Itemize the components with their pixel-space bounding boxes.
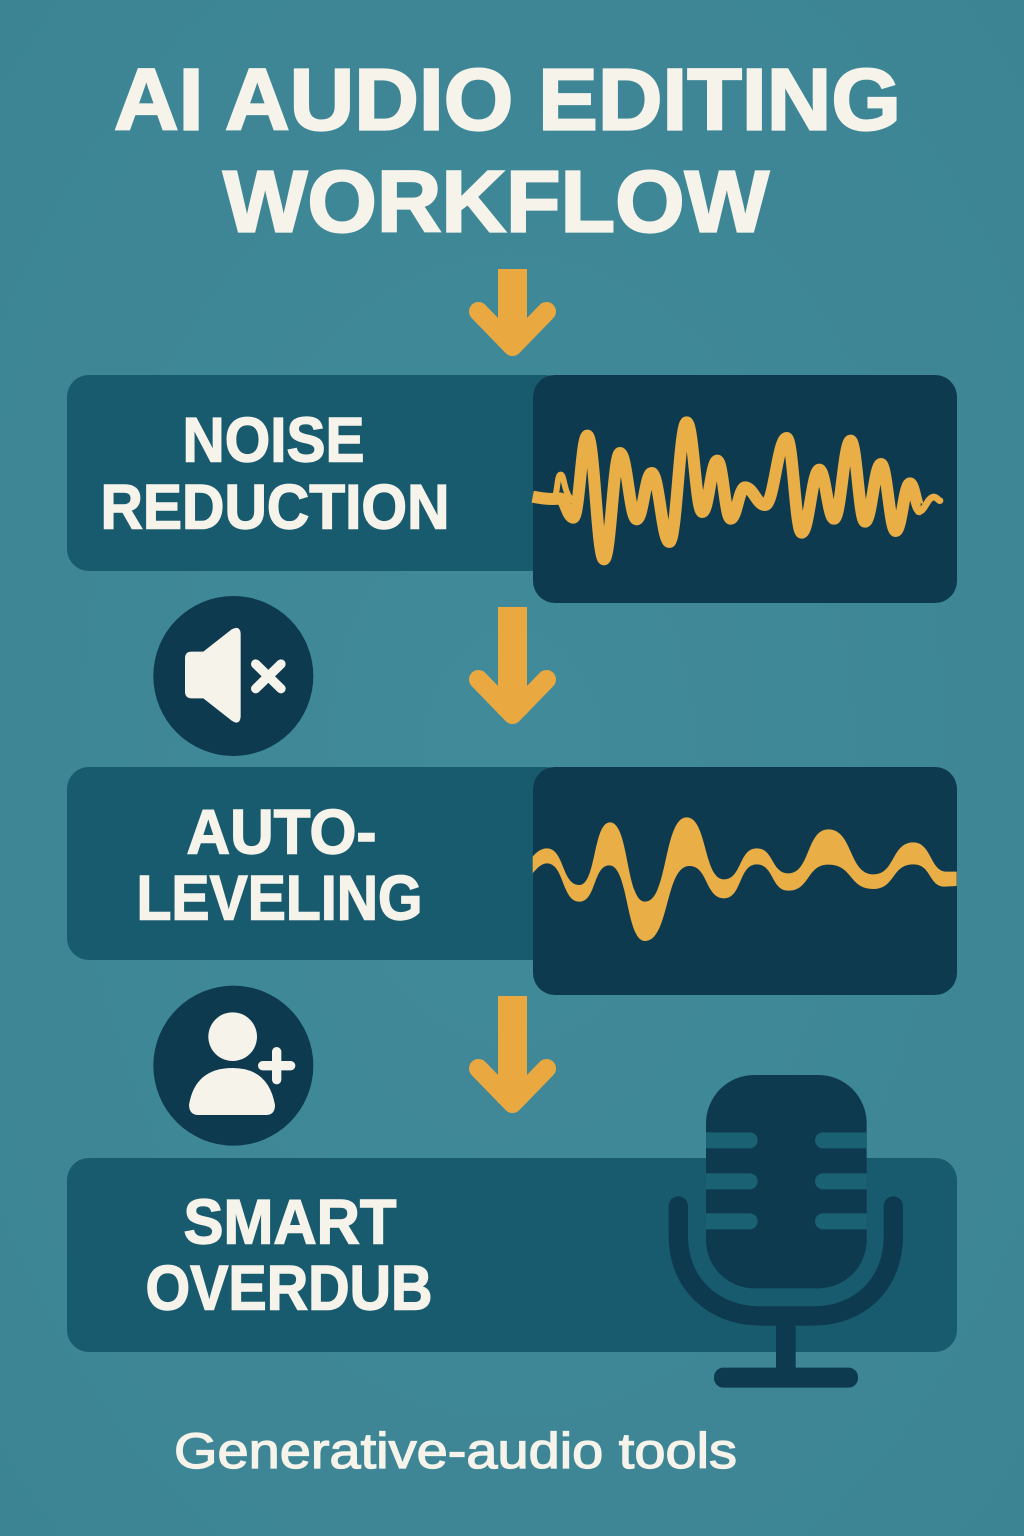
icon: muted speaker bbox=[153, 596, 313, 756]
heading: noise reduction: NOISE bbox=[182, 406, 364, 476]
waveform card: noisy bbox=[533, 375, 957, 603]
heading: noise reduction: REDUCTION bbox=[100, 472, 450, 542]
panel background bbox=[67, 375, 567, 571]
panel background bbox=[67, 767, 567, 960]
icon: microphone bbox=[678, 1075, 893, 1388]
arrow: noise reduction to auto-leveling bbox=[478, 607, 546, 714]
heading: auto-leveling: LEVELING bbox=[136, 864, 422, 934]
caption: Generative-audio tools bbox=[174, 1423, 737, 1479]
title bbox=[114, 52, 901, 250]
heading: auto-leveling bbox=[136, 798, 422, 934]
heading: smart overdub bbox=[146, 1188, 432, 1324]
heading: auto-leveling: AUTO- bbox=[186, 798, 376, 868]
title: AI AUDIO EDITING bbox=[114, 52, 901, 148]
panel background bbox=[67, 1158, 957, 1352]
waveform card: leveled bbox=[533, 767, 957, 995]
heading: smart overdub: OVERDUB bbox=[146, 1254, 432, 1324]
icon: add person bbox=[153, 986, 313, 1146]
arrow: title to noise reduction bbox=[478, 269, 546, 346]
panel: smart overdub bbox=[67, 1158, 957, 1352]
title: WORKFLOW bbox=[223, 154, 770, 250]
heading: noise reduction bbox=[100, 406, 450, 542]
panel: noise reduction bbox=[67, 375, 957, 603]
arrow: auto-leveling to smart overdub bbox=[478, 996, 546, 1104]
panel: auto-leveling bbox=[67, 767, 957, 995]
heading: smart overdub: SMART bbox=[184, 1188, 396, 1258]
